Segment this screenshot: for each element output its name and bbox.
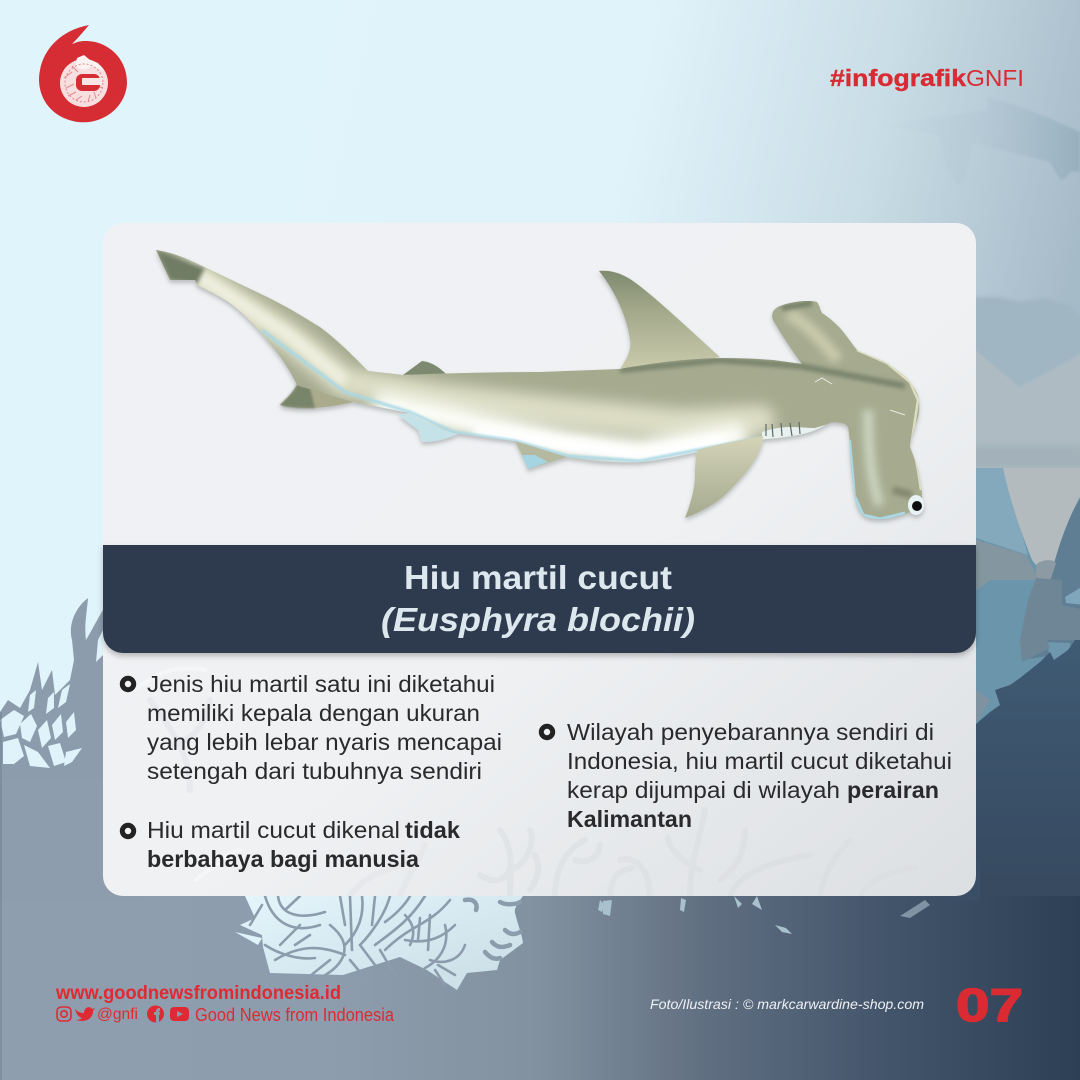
faint shark silhouette top right — [883, 97, 1080, 186]
text block: left bullets: yang lebih lebar nyaris mencapai — [147, 729, 502, 755]
text block: right bullet: Wilayah penyebarannya sendiri di — [567, 719, 934, 745]
coral mass — [0, 598, 1080, 1080]
coral opening below card — [235, 896, 930, 990]
logo emblem — [60, 55, 108, 107]
text block: left bullets: Jenis hiu martil satu ini diketahui — [147, 671, 495, 697]
text block: right bullet: perairan — [847, 777, 939, 803]
pelvic fin — [515, 441, 567, 469]
icon: facebook — [147, 1006, 164, 1023]
bullet 1 — [122, 678, 134, 690]
photo credit: Foto/Ilustrasi : © markcarwardine-shop.com — [650, 996, 924, 1012]
shark illustration — [150, 240, 940, 530]
title — [381, 559, 695, 638]
footer contacts: www.goodnewsfromindonesia.id — [55, 983, 341, 1004]
background — [688, 0, 1080, 896]
left coral silhouette — [0, 598, 103, 780]
head markings — [788, 314, 838, 360]
logo — [39, 25, 127, 122]
text block: left bullets — [122, 671, 502, 872]
grey band — [976, 540, 1038, 590]
text block: right bullet: kerap dijumpai di wilayah — [567, 777, 840, 803]
hashtag — [830, 65, 1024, 91]
footer contacts — [55, 983, 395, 1025]
icon: instagram — [57, 1007, 71, 1021]
panel: card — [103, 223, 976, 896]
text block: left bullets: Hiu martil cucut dikenal — [147, 817, 400, 843]
text block: left bullets: tidak — [405, 817, 460, 843]
lower caudal fin — [280, 380, 353, 408]
dorsal fin — [599, 271, 720, 369]
light coral fragments — [598, 896, 930, 934]
bullet 2 — [122, 825, 134, 837]
body and head — [150, 240, 940, 530]
text block: right bullet — [541, 719, 952, 832]
second dorsal fin — [403, 361, 446, 375]
anal fin — [398, 413, 458, 442]
hashtag: GNFI — [966, 65, 1024, 91]
text block: right bullet: Kalimantan — [567, 806, 692, 832]
title: (Eusphyra blochii) — [381, 601, 695, 638]
text block: right bullet: Indonesia, hiu martil cucut diketahui — [567, 748, 952, 774]
icon: youtube — [170, 1007, 189, 1021]
dark coral — [976, 640, 1080, 900]
eye — [908, 495, 924, 515]
icon: twitter — [75, 1007, 95, 1021]
blurred shark and water on right — [970, 297, 1080, 900]
title: Hiu martil cucut — [404, 559, 672, 596]
text block: left bullets: memiliki kepala dengan ukuran — [147, 700, 480, 726]
pale shark fin — [1003, 468, 1080, 570]
ghost coral in card — [79, 1016, 164, 1021]
hashtag: #infografik — [830, 65, 966, 91]
footer contacts: @gnfi — [97, 1006, 138, 1023]
title band — [103, 545, 976, 653]
page number: 07 — [956, 979, 1023, 1031]
pectoral fin — [685, 436, 763, 518]
footer contacts: Good News from Indonesia — [195, 1005, 395, 1025]
text block: left bullets: berbahaya bagi manusia — [147, 846, 419, 872]
coral gaps — [0, 630, 103, 768]
right side water — [1028, 499, 1080, 659]
text block: left bullets: setengah dari tubuhnya sendiri — [147, 758, 482, 784]
gills — [762, 422, 828, 440]
